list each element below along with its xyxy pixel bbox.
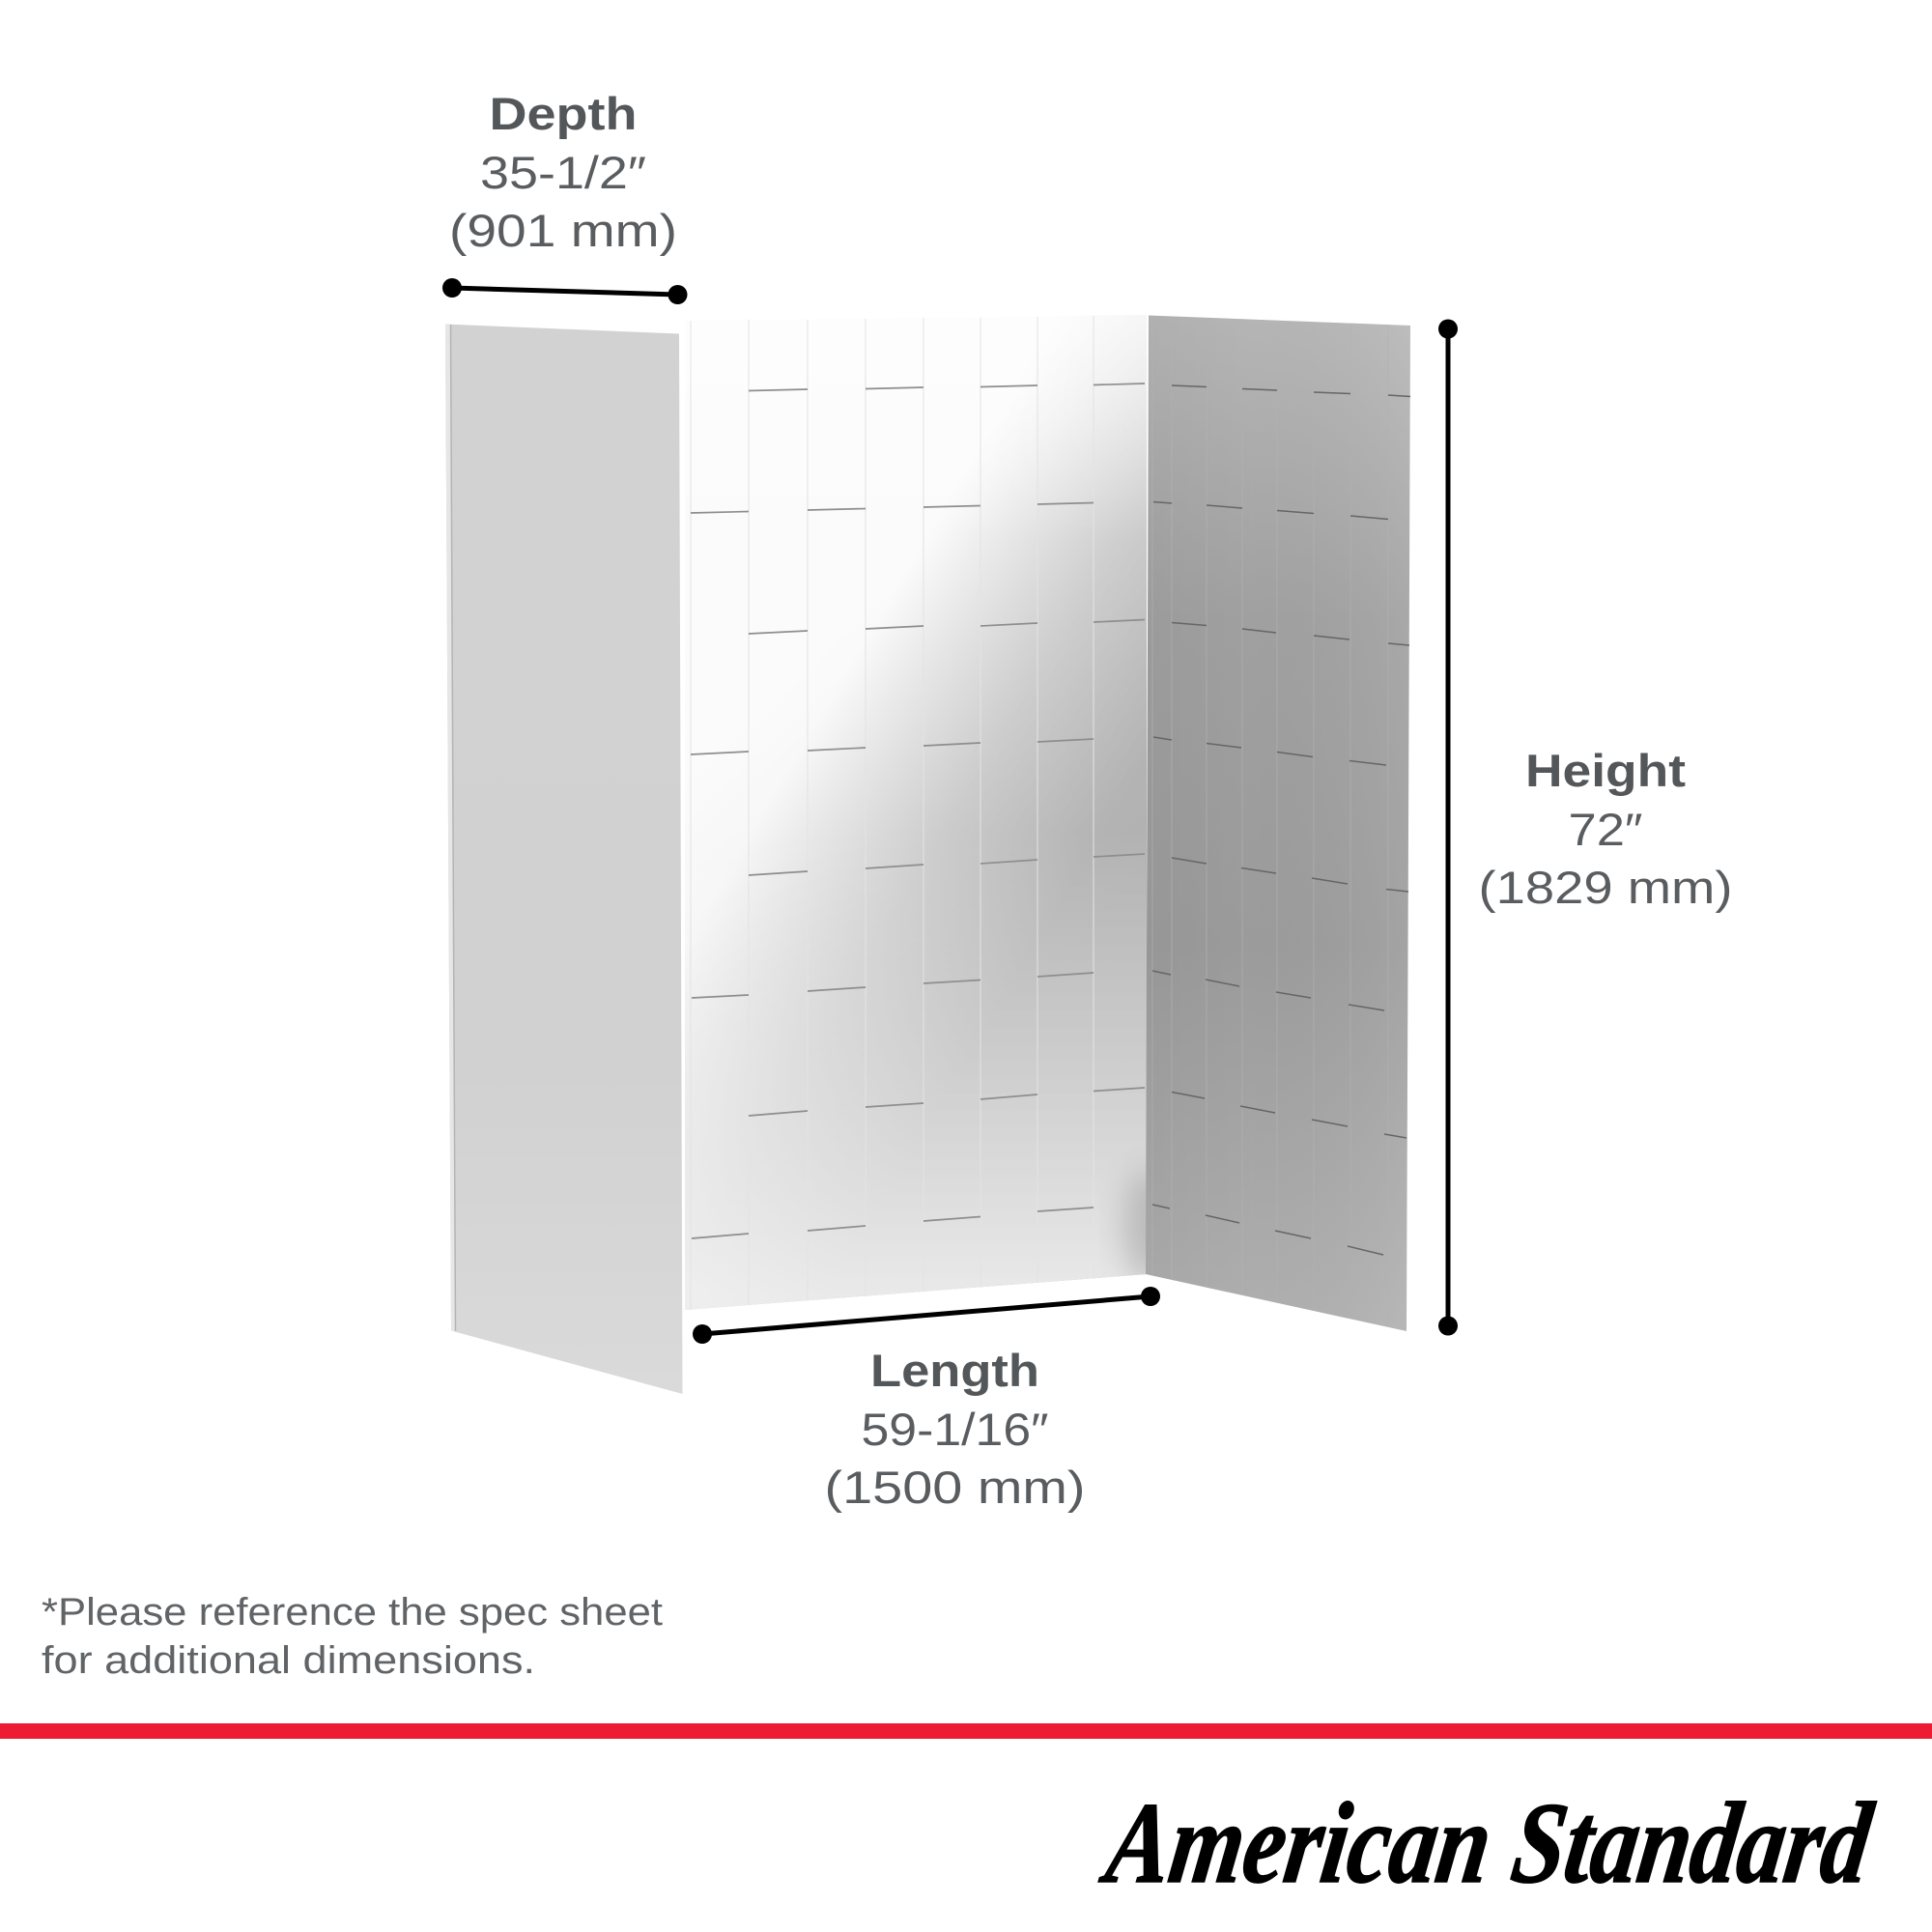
back wall with vertical tile pattern bbox=[676, 309, 1175, 1323]
footnote: *Please reference the spec sheet bbox=[42, 1591, 663, 1634]
footnote bbox=[42, 1591, 663, 1682]
depth label: 35-1/2″ bbox=[480, 147, 646, 198]
depth label: (901 mm) bbox=[449, 205, 677, 256]
depth label: Depth bbox=[489, 88, 638, 139]
height label: 72″ bbox=[1569, 804, 1642, 855]
length label bbox=[825, 1345, 1086, 1513]
depth dimension line bbox=[442, 278, 688, 304]
side wall right with tile pattern bbox=[1146, 315, 1410, 1331]
length label: Length bbox=[870, 1345, 1039, 1396]
height dimension line bbox=[1438, 319, 1458, 1335]
side wall left panel bbox=[445, 325, 682, 1394]
length label: (1500 mm) bbox=[825, 1462, 1086, 1513]
depth label bbox=[449, 88, 677, 256]
height label: Height bbox=[1525, 745, 1686, 796]
red divider bar bbox=[0, 1723, 1932, 1739]
length label: 59-1/16″ bbox=[862, 1404, 1049, 1455]
shower wall illustration bbox=[445, 309, 1410, 1394]
height label bbox=[1478, 745, 1733, 913]
height label: (1829 mm) bbox=[1478, 862, 1733, 913]
length dimension line bbox=[693, 1287, 1160, 1344]
footnote: for additional dimensions. bbox=[42, 1639, 535, 1682]
